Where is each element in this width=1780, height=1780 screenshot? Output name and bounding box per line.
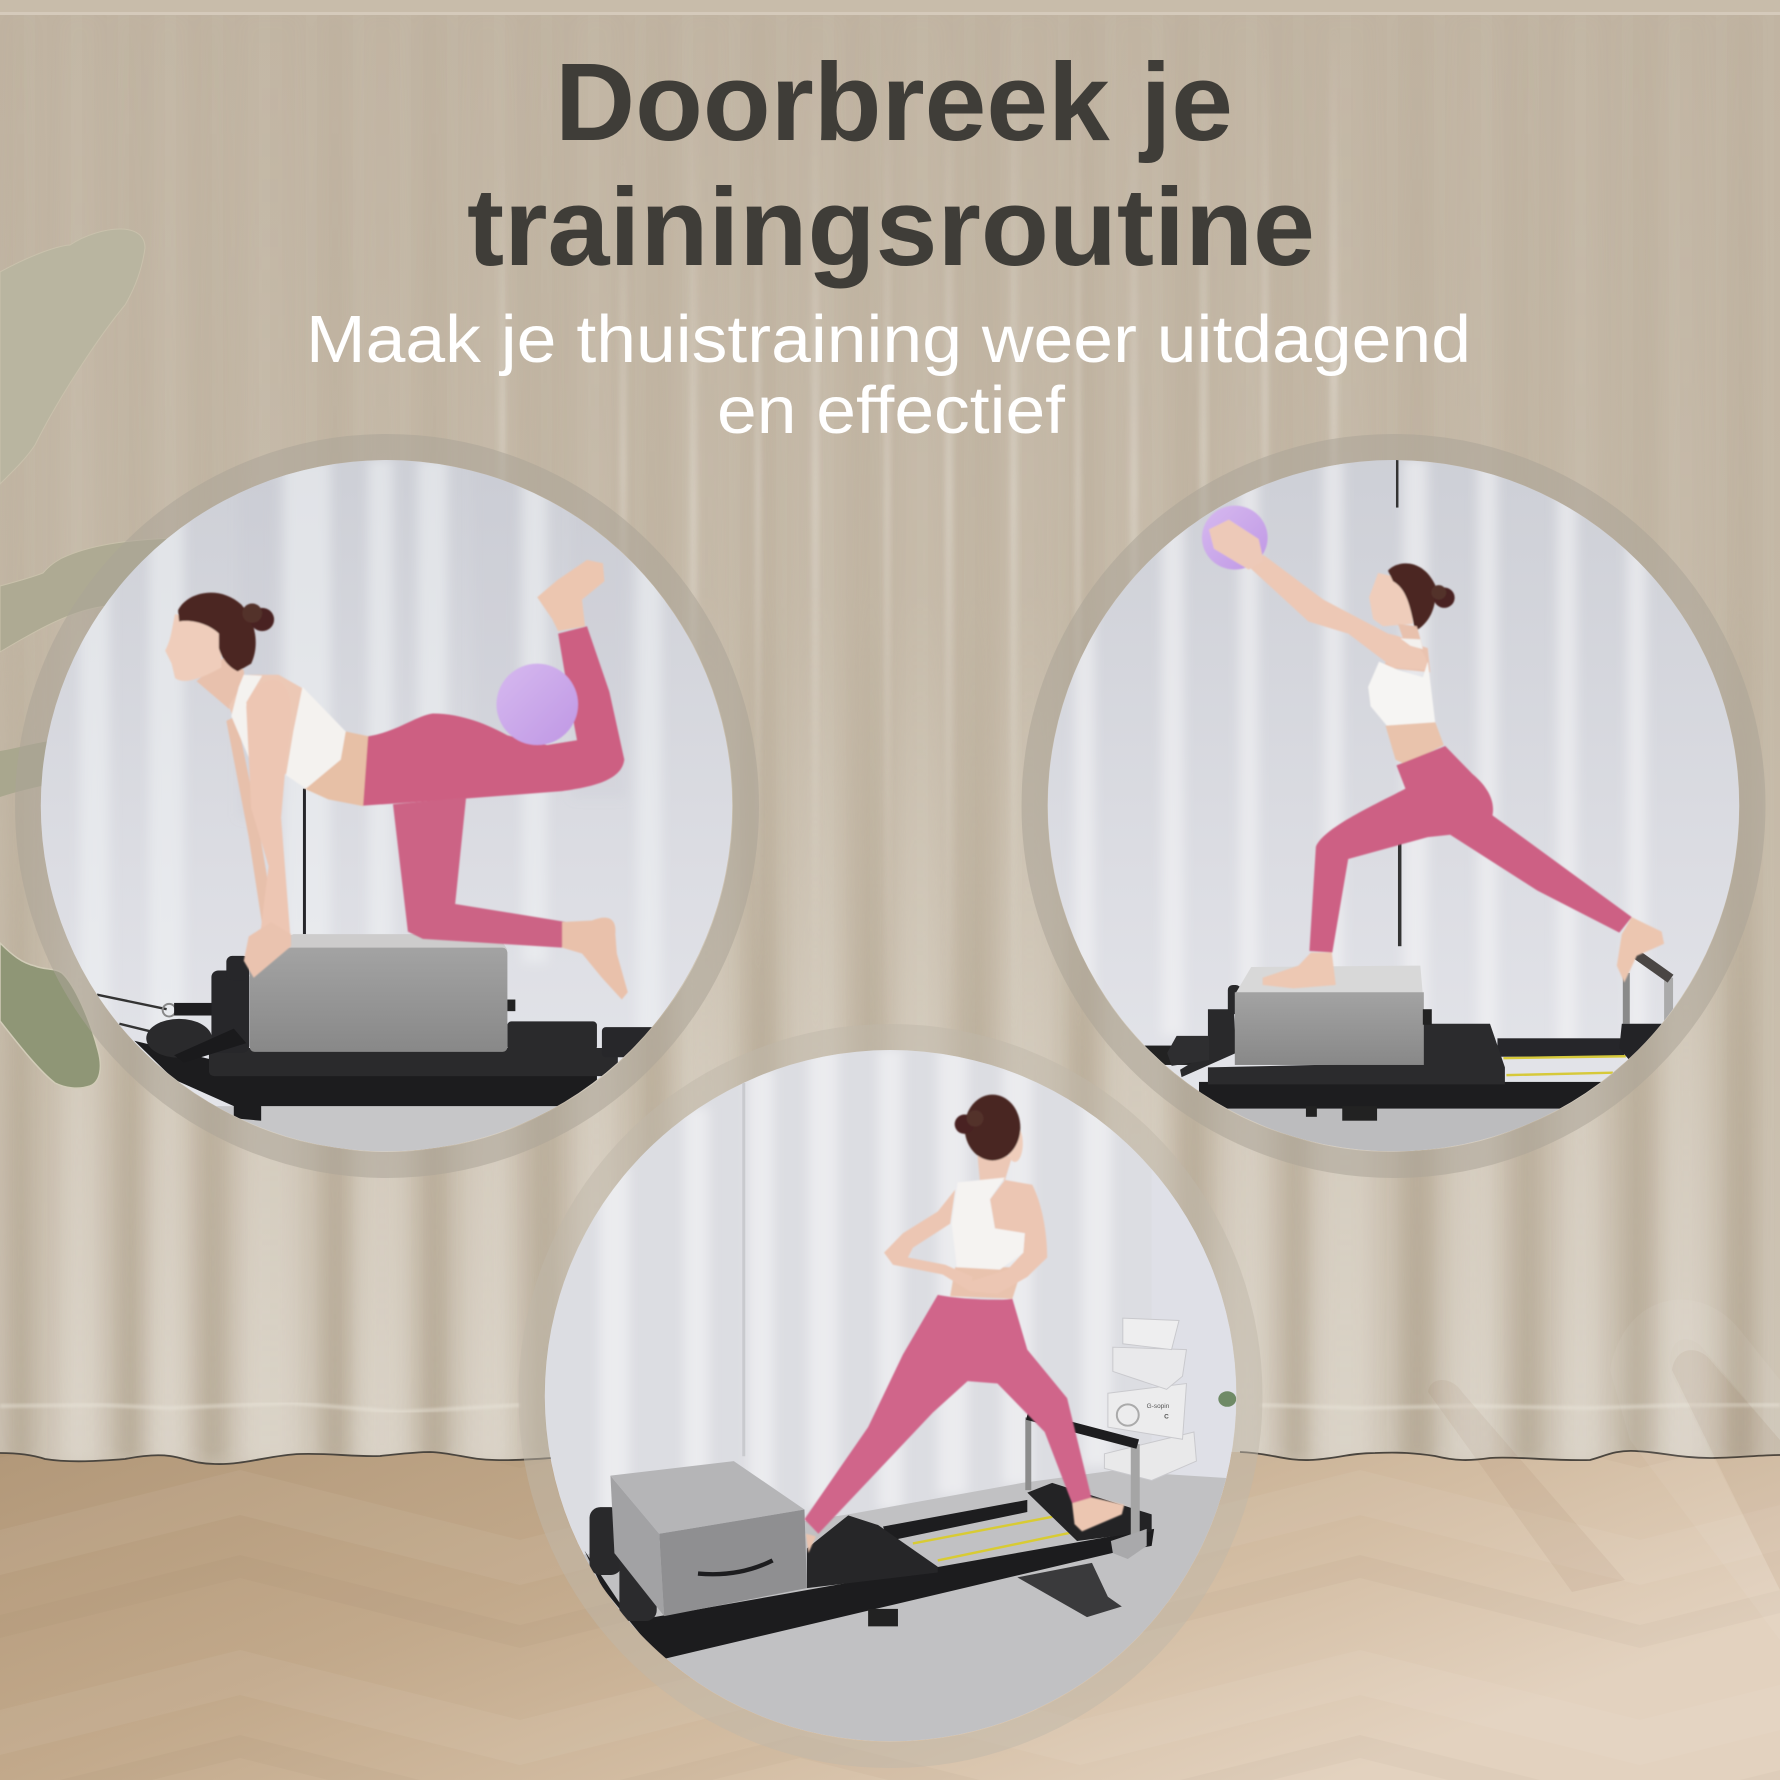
- padded box: [250, 934, 515, 1052]
- watermark diagonal stripes: [1428, 1299, 1780, 1640]
- reformer machine: [1144, 946, 1673, 1121]
- leaf: bottom: [0, 943, 100, 1088]
- leaf: top: [0, 229, 145, 484]
- padded box: [1235, 966, 1432, 1065]
- circle frame ring: bottom: [532, 1037, 1250, 1755]
- title: [467, 41, 1315, 289]
- curtain hem line: [0, 1403, 1780, 1412]
- subtitle line 1: Maak je thuistraining weer uitdagend: [306, 302, 1471, 377]
- woman: [165, 560, 628, 1000]
- title line 2: trainingsroutine: [467, 166, 1315, 289]
- background: herringbone wood floor: [0, 1451, 1780, 1780]
- plant leaves: [0, 229, 175, 1088]
- subtitle: [306, 302, 1471, 448]
- title line 1: Doorbreek je: [555, 41, 1233, 164]
- leaf: middle: [0, 538, 175, 652]
- cable: [1396, 459, 1398, 508]
- reformer machine: [97, 956, 657, 1121]
- circle frame ring: right: [1034, 447, 1752, 1165]
- woman: [804, 1095, 1124, 1553]
- photo circle: lunge pose holding ball overhead: [1030, 449, 1756, 1164]
- circle frame ring: left: [28, 447, 746, 1165]
- woman: [1202, 506, 1664, 988]
- cable lower: [1398, 842, 1401, 946]
- storage boxes: C: [1164, 1413, 1169, 1420]
- photo circle: kneeling pose with ball behind knee: [30, 449, 746, 1164]
- cable: [303, 789, 306, 934]
- small plant: [1218, 1391, 1236, 1407]
- storage boxes: G-sopin: [1147, 1403, 1170, 1410]
- storage boxes: [1104, 1318, 1196, 1480]
- photo circle: side lunge seen from behind: [530, 1039, 1256, 1752]
- padded box: [610, 1461, 807, 1616]
- leaf: lower middle: [0, 740, 60, 797]
- reformer machine: [585, 1415, 1154, 1659]
- subtitle line 2: en effectief: [717, 373, 1065, 448]
